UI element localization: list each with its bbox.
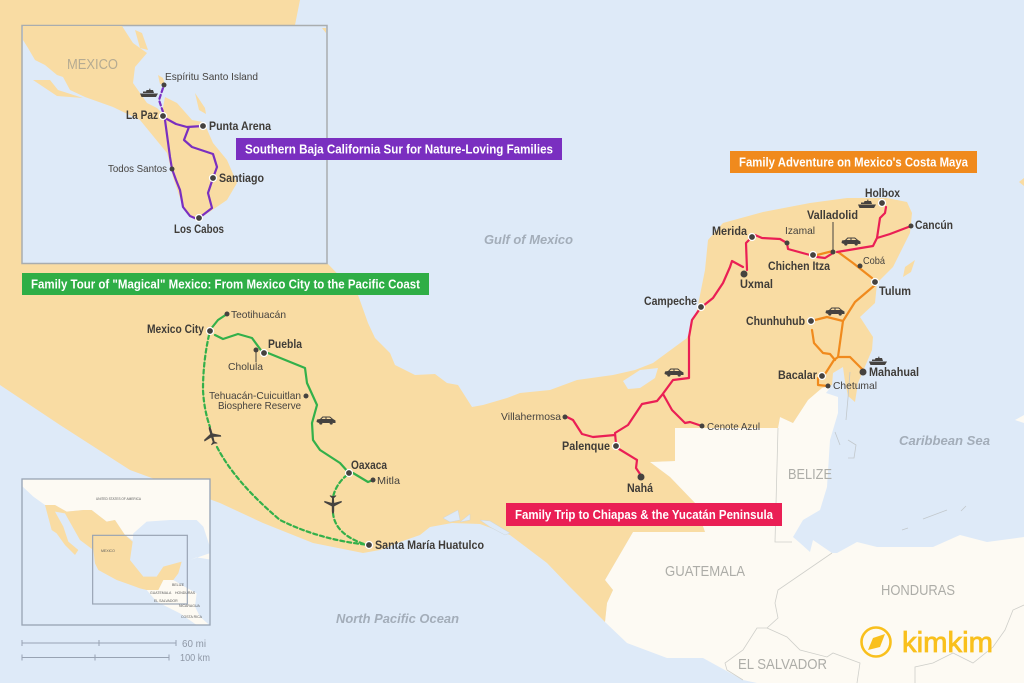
route: red Chiapas and Yucatan <box>567 207 911 474</box>
inset label: MEXICO: MEXICO <box>67 56 118 73</box>
green stop labels: Puebla <box>268 339 303 351</box>
country labels: BELIZE <box>788 466 832 483</box>
green stop labels: Cholula <box>228 361 263 373</box>
route: orange Costa Maya <box>811 251 875 386</box>
locator: country labels <box>96 497 203 619</box>
icon: plane to Huatulco <box>201 424 223 447</box>
locator: country labels: HONDURAS <box>175 591 196 595</box>
icon: plane from Oaxaca <box>324 495 342 514</box>
lagoons and islands <box>443 178 1024 535</box>
icon: compass <box>862 628 890 656</box>
land: Central America <box>605 387 1024 683</box>
heading: Southern Baja California Sur: Southern Baja California Sur for Nature-Loving Families <box>245 142 553 156</box>
locator: USA <box>23 479 209 545</box>
icon: ferry Holbox <box>858 199 876 208</box>
ocean and sea labels: North Pacific Ocean <box>336 611 459 626</box>
logo: kimkim: kimkim <box>902 627 993 659</box>
locator: country labels: NICARAGUA <box>179 604 200 608</box>
country borders <box>725 428 1024 683</box>
scale bars: 100 km <box>180 653 210 664</box>
green stop labels: Tehuacán-Cuicuitlan <box>209 390 301 402</box>
route: green Magical Mexico <box>203 314 373 545</box>
inset land <box>23 26 326 220</box>
Yucatan stop labels: Holbox <box>865 188 901 200</box>
heading: Family Trip to Chiapas and the Yucatan: Family Trip to Chiapas & the Yucatán Peninsula <box>515 508 774 522</box>
panel: Baja California inset map <box>22 26 327 264</box>
heading: Family Tour of Magical Mexico: Family Tour of "Magical" Mexico: From Mexico City to the Pacific Coast <box>31 278 421 292</box>
ocean and sea labels <box>336 232 990 626</box>
logo: kimkim <box>862 627 993 659</box>
locator: country labels: GUATEMALA <box>150 591 172 595</box>
heading: Family Trip to Chiapas and the Yucatan <box>506 503 782 526</box>
Yucatan stop labels: Villahermosa <box>501 411 561 423</box>
Yucatan stop labels: Cobá <box>863 255 885 267</box>
Yucatan stop labels: Cenote Azul <box>707 421 760 433</box>
green stops <box>206 312 376 548</box>
Yucatan stop labels: Mahahual <box>869 367 919 379</box>
Yucatan stops <box>562 200 914 480</box>
locator: country labels: COSTA RICA <box>181 615 203 619</box>
stops <box>160 82 216 222</box>
stop labels: Punta Arena <box>209 121 272 133</box>
country labels: EL SALVADOR <box>738 656 827 673</box>
Yucatan stop labels: Tulum <box>879 286 911 298</box>
green stop labels: Mitla <box>377 475 400 487</box>
stop labels <box>108 71 272 236</box>
Yucatan stop labels: Chichen Itza <box>768 261 831 273</box>
stop labels: La Paz <box>126 110 158 122</box>
panel: locator map <box>22 479 210 625</box>
route: southern Baja <box>159 85 217 219</box>
green stop labels: Santa María Huatulco <box>375 540 484 552</box>
icon: car Campeche road <box>664 368 684 377</box>
icon: car Oaxaca road <box>316 416 336 425</box>
icon: ferry Mahahual <box>869 356 887 365</box>
country labels: GUATEMALA <box>665 563 745 580</box>
Yucatan stop labels: Chunhuhub <box>746 316 805 328</box>
heading: Family Adventure on Mexico's Costa Maya: Family Adventure on Mexico's Costa Maya <box>739 156 969 170</box>
Yucatan stop labels: Uxmal <box>740 279 773 291</box>
icon: ferry <box>140 88 158 97</box>
stop labels: Espíritu Santo Island <box>165 71 258 83</box>
scale bars <box>22 639 210 664</box>
locator: country labels: EL SALVADOR <box>154 599 178 603</box>
Yucatan stop labels: Izamal <box>785 225 815 237</box>
leader line: Valladolid <box>832 222 834 252</box>
Yucatan stop labels: Valladolid <box>807 210 858 222</box>
Yucatan stop labels: Chetumal <box>833 380 877 392</box>
locator: country labels: UNITED STATES OF AMERICA <box>96 497 142 501</box>
green stop labels: Teotihuacán <box>231 309 286 321</box>
locator: Central America <box>147 580 209 625</box>
green stop labels: Oaxaca <box>351 460 388 472</box>
Yucatan stop labels: Bacalar <box>778 370 817 382</box>
locator: current view rectangle <box>93 535 187 604</box>
ocean and sea labels: Gulf of Mexico <box>484 232 573 247</box>
country labels <box>665 466 955 673</box>
locator: Mexico <box>45 505 182 590</box>
green stop labels: Biosphere Reserve <box>218 400 301 412</box>
Yucatan stop labels: Cancún <box>915 220 953 232</box>
locator: country labels: BELIZE <box>172 583 185 587</box>
ocean and sea labels: Caribbean Sea <box>899 433 990 448</box>
heading: Southern Baja California Sur <box>236 138 562 160</box>
green stop labels: Mexico City <box>147 324 205 336</box>
Yucatan stop labels: Merida <box>712 226 748 238</box>
stop labels: Santiago <box>219 173 264 185</box>
country labels: HONDURAS <box>881 582 955 599</box>
Yucatan stop labels: Palenque <box>562 441 610 453</box>
leader line: Cholula <box>255 351 257 362</box>
green stop labels <box>147 309 484 552</box>
Yucatan stop labels: Nahá <box>627 483 654 495</box>
icon: car Yucatan north <box>842 238 860 246</box>
locator: frame <box>22 479 210 625</box>
icon: car Chunhuhub <box>826 308 844 316</box>
stop labels: Todos Santos <box>108 163 167 175</box>
heading: Family Tour of Magical Mexico <box>22 273 429 295</box>
Yucatan stop labels <box>501 188 953 495</box>
heading: Family Adventure on Mexico's Costa Maya <box>730 151 977 173</box>
stop labels: Los Cabos <box>174 224 224 236</box>
scale bars: 60 mi <box>182 639 206 650</box>
locator: country labels: MEXICO <box>101 549 115 553</box>
Yucatan stop labels: Campeche <box>644 296 697 308</box>
